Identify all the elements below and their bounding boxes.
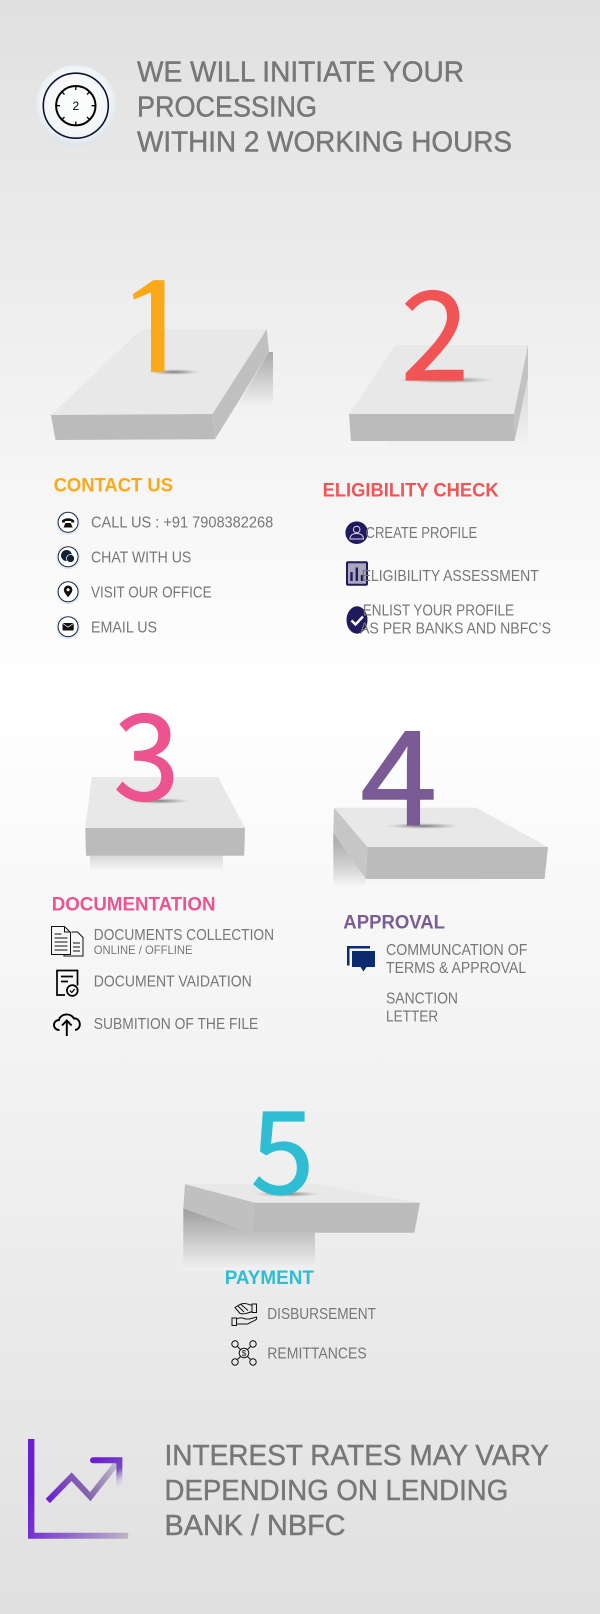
sanction text: SANCTION [386, 990, 458, 1007]
icon: chat [56, 546, 80, 569]
panel: contact us [54, 475, 273, 639]
step 4 platform [333, 808, 548, 888]
eligibility assessment text: ELIGIBILITY ASSESSMENT [362, 568, 539, 585]
terms text: TERMS & APPROVAL [386, 960, 526, 977]
icon: location pin [56, 580, 80, 604]
step 1 platform [51, 329, 273, 440]
icon: check badge [346, 606, 368, 634]
panel: documentation [52, 894, 274, 1036]
panel: payment [225, 1267, 376, 1365]
footer note: BANK / NBFC [164, 1510, 346, 1542]
icon: documents [52, 926, 83, 956]
step 2 platform [349, 345, 528, 448]
icon: clock badge: 2 [72, 99, 79, 113]
heading: processing time: WE WILL INITIATE YOUR [137, 57, 464, 89]
step 5 platform [183, 1184, 420, 1270]
icon: disbursement hands [232, 1304, 257, 1326]
icon: cloud upload [54, 1014, 80, 1036]
icon: phone [56, 511, 80, 535]
heading: payment: PAYMENT [225, 1267, 314, 1289]
heading: contact us: CONTACT US [54, 475, 173, 497]
heading: documentation: DOCUMENTATION [52, 894, 216, 916]
step 2 number: 2 [401, 238, 469, 416]
heading: eligibility check: ELIGIBILITY CHECK [323, 480, 499, 502]
icon: remittances [232, 1341, 256, 1365]
remittances text: REMITTANCES [267, 1345, 367, 1362]
email text: EMAIL US [91, 619, 157, 636]
as per banks text: AS PER BANKS AND NBFC’S [360, 620, 551, 637]
panel: eligibility check [323, 480, 551, 637]
document validation text: DOCUMENT VAIDATION [94, 974, 252, 991]
online offline text: ONLINE / OFFLINE [94, 943, 192, 957]
submission text: SUBMITION OF THE FILE [94, 1016, 258, 1033]
heading: processing time [137, 57, 512, 159]
documents collection text: DOCUMENTS COLLECTION [94, 927, 274, 944]
step 4 number: 4 [360, 673, 437, 863]
step 3 number: 3 [113, 663, 180, 835]
disbursement text: DISBURSEMENT [267, 1306, 376, 1323]
footer note: INTEREST RATES MAY VARY [164, 1440, 549, 1472]
chat text: CHAT WITH US [91, 549, 191, 566]
icon: document validation [57, 970, 78, 996]
heading: processing time: PROCESSING [137, 92, 317, 124]
icon: clock badge [35, 65, 116, 146]
heading: approval: APPROVAL [343, 912, 445, 934]
footer note [164, 1440, 549, 1542]
visit text: VISIT OUR OFFICE [91, 584, 212, 601]
communication text: COMMUNCATION OF [386, 942, 528, 959]
icon: email [56, 615, 80, 639]
icon: profile [345, 521, 368, 544]
enlist text: ENLIST YOUR PROFILE [363, 602, 514, 619]
panel: approval [343, 912, 528, 1025]
heading: processing time: WITHIN 2 WORKING HOURS [137, 127, 512, 159]
icon: bar chart [347, 562, 367, 585]
letter text: LETTER [386, 1008, 438, 1025]
step 3 platform [85, 777, 245, 872]
icon: speech bubbles [347, 946, 375, 972]
create profile text: CREATE PROFILE [366, 525, 477, 542]
step 5 number: 5 [251, 1062, 314, 1226]
icon: rising chart [28, 1439, 128, 1539]
step 1 number: 1 [120, 254, 193, 401]
call us text: CALL US : +91 7908382268 [91, 515, 273, 532]
footer note: DEPENDING ON LENDING [164, 1475, 508, 1507]
icon: remittances: $ [242, 1349, 247, 1358]
